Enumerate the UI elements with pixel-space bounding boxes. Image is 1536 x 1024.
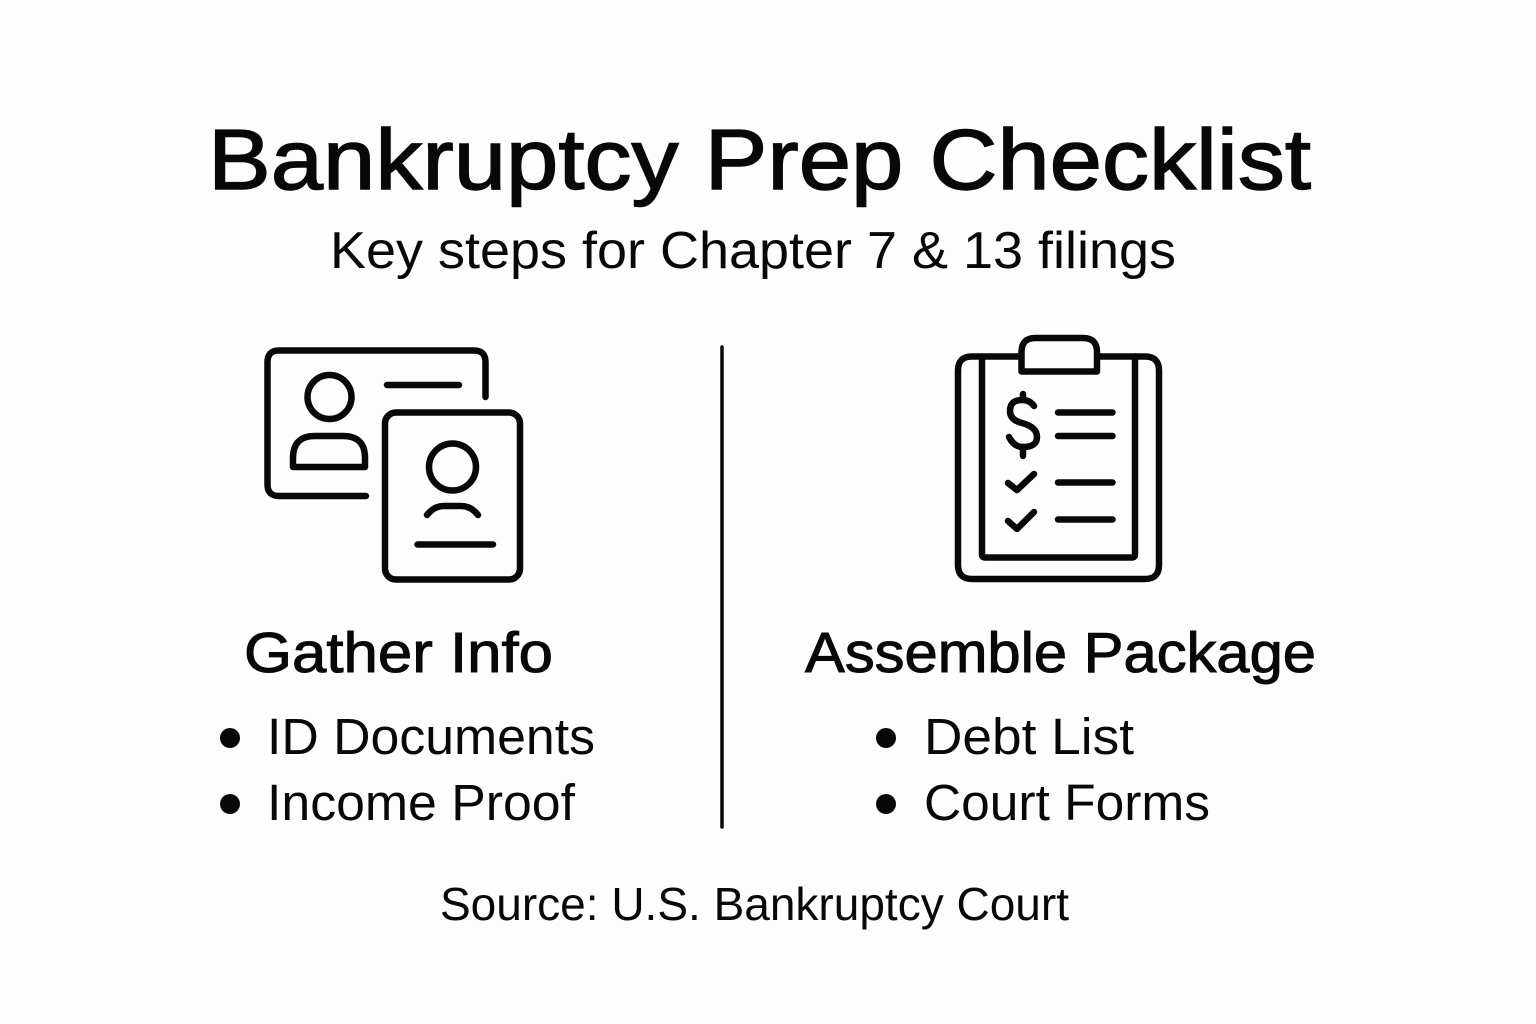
right heading: Assemble Package <box>805 621 1316 685</box>
left heading: Gather Info <box>244 621 553 685</box>
divider <box>720 347 724 827</box>
back ID card outline <box>268 350 486 496</box>
subtitle: Key steps for Chapter 7 & 13 filings <box>330 222 1176 280</box>
left list <box>220 708 595 831</box>
source: Source: U.S. Bankruptcy Court <box>440 878 1069 930</box>
paper sheet <box>982 356 1135 558</box>
dollar sign <box>1009 394 1037 456</box>
icon: clipboard checklist <box>958 338 1159 579</box>
back card text line <box>387 382 459 388</box>
front card portrait <box>427 444 478 515</box>
clipboard board <box>958 356 1159 579</box>
left list: Income Proof <box>267 774 576 831</box>
left list: ID Documents <box>267 708 595 765</box>
clip <box>1022 338 1097 372</box>
title: Bankruptcy Prep Checklist <box>208 113 1311 208</box>
front card text line <box>418 541 493 548</box>
front ID card outline <box>385 412 520 580</box>
icon: ID documents <box>268 350 520 580</box>
right list: Court Forms <box>924 774 1210 831</box>
right list: Debt List <box>924 708 1134 765</box>
right list <box>876 708 1210 831</box>
checkmarks <box>1008 474 1034 490</box>
back card portrait <box>293 375 365 467</box>
checklist lines <box>1058 412 1112 520</box>
